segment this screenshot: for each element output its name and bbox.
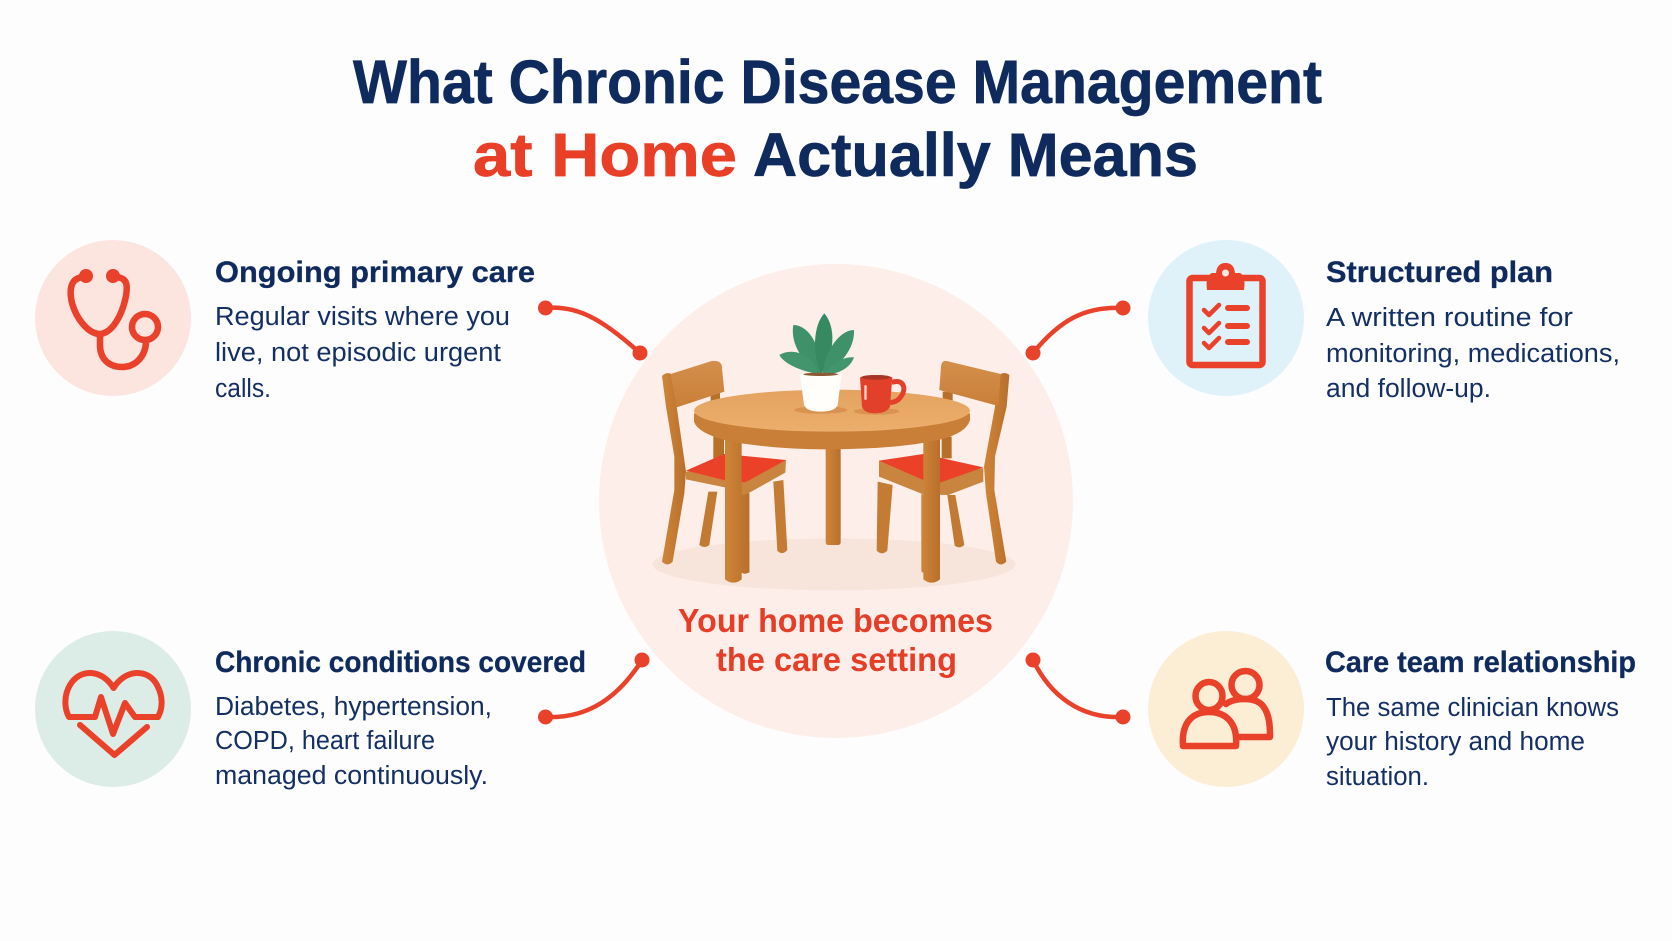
body text: A written routine for [1326, 304, 1574, 332]
mug [854, 375, 904, 415]
central circle panel: home as care setting [599, 264, 1073, 738]
body text: and follow-up. [1326, 375, 1491, 403]
right chair [877, 361, 1009, 564]
title: Actually Means [753, 121, 1198, 189]
central caption [678, 602, 993, 678]
table [694, 390, 970, 583]
body text [215, 693, 492, 790]
panel: structured plan [1148, 240, 1620, 403]
body text: managed continuously. [215, 762, 488, 790]
body text [215, 303, 510, 403]
title: What Chronic Disease Management [353, 48, 1322, 116]
icon: stethoscope [35, 240, 191, 396]
arrow: connector bottom right [1026, 652, 1130, 724]
icon: two people [1148, 631, 1304, 787]
body text: situation. [1326, 763, 1429, 791]
body text: live, not episodic urgent [215, 339, 501, 367]
body text: your history and home [1326, 728, 1585, 756]
title: at Home [473, 121, 737, 189]
body text [1326, 304, 1620, 403]
heading: Ongoing primary care [215, 256, 535, 289]
panel: chronic conditions covered [35, 631, 586, 790]
left chair [662, 361, 787, 574]
body text: Regular visits where you [215, 303, 510, 331]
panel: ongoing primary care [35, 240, 535, 403]
central caption: the care setting [716, 641, 957, 678]
body text [1326, 694, 1619, 791]
body text: COPD, heart failure [215, 727, 435, 755]
arrow: connector top left [538, 300, 648, 360]
body text: monitoring, medications, [1326, 340, 1620, 368]
heading: Structured plan [1326, 256, 1553, 289]
central caption: Your home becomes [678, 602, 993, 639]
body text: The same clinician knows [1326, 694, 1619, 722]
heading: Care team relationship [1325, 646, 1636, 679]
icon: heart with pulse [35, 631, 191, 787]
illustration: dining table with chairs, plant and mug [652, 313, 1016, 590]
panel: care team relationship [1148, 631, 1636, 791]
floor shadow [652, 538, 1016, 590]
body text: Diabetes, hypertension, [215, 693, 492, 721]
arrow: connector bottom left [538, 652, 650, 724]
icon: clipboard checklist [1148, 240, 1304, 396]
heading: Chronic conditions covered [215, 646, 586, 679]
arrow: connector top right [1026, 300, 1130, 360]
plant and pot [779, 313, 854, 414]
body text: calls. [215, 375, 271, 403]
title [353, 48, 1322, 189]
